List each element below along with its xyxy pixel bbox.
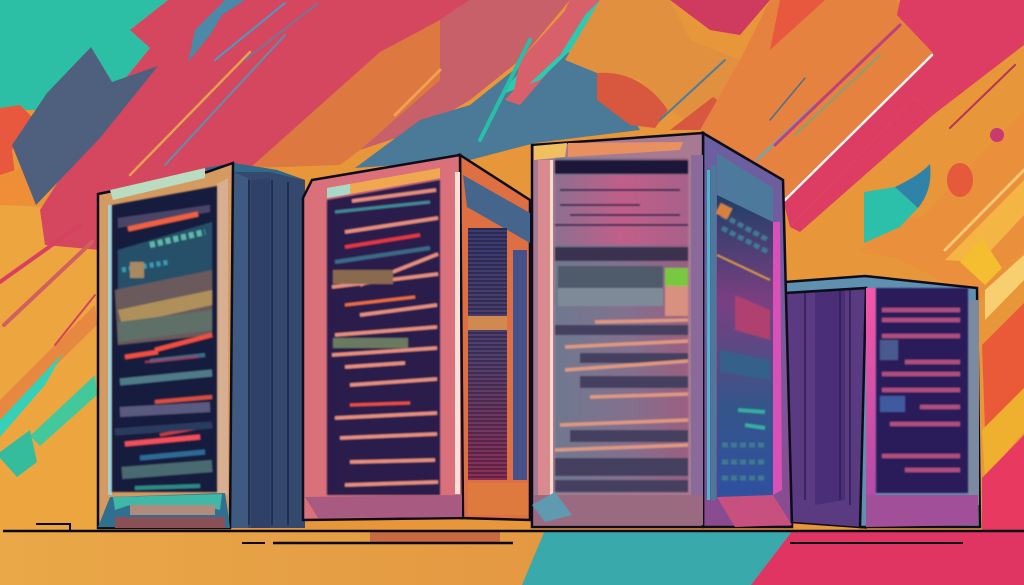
rack 1	[98, 163, 305, 528]
rack 2 front frame	[303, 155, 463, 520]
rack 3 side panel	[703, 133, 792, 527]
orange streak zone	[700, 0, 933, 200]
rack 4 front frame	[785, 276, 980, 527]
teal-blue leaf shape	[864, 164, 930, 243]
dark slate patch	[12, 47, 158, 205]
red-orange arcs	[597, 73, 668, 128]
rack 3	[532, 133, 792, 527]
blue haze behind racks	[355, 50, 640, 168]
ground lines	[3, 524, 1024, 543]
rack 1 server bays	[112, 186, 217, 492]
rack 3 front frame	[532, 133, 703, 527]
red main wash	[40, 0, 470, 250]
rack 2 side panel	[460, 155, 530, 520]
rack 2 base	[305, 172, 462, 518]
red diagonal band	[783, 0, 1024, 227]
rack 4	[785, 276, 980, 528]
rack 4 side panel	[785, 280, 866, 528]
left lower paint strokes	[0, 305, 97, 477]
rack 1 front frame	[98, 163, 233, 528]
floor colour blocks	[0, 530, 1024, 585]
rack 4 base	[866, 495, 978, 527]
rack 2 server bays	[327, 180, 440, 500]
rack 1 side panel	[205, 163, 305, 528]
rack 3 server bays	[555, 158, 688, 493]
rack 2	[303, 155, 530, 520]
red and teal streaks, top centre	[360, 0, 570, 150]
right side pale stripes	[945, 180, 1024, 320]
rack 4 server bays	[876, 288, 968, 493]
upper blue shard	[188, 0, 245, 62]
rack 1 teal plinth	[98, 493, 230, 528]
rack 3 base	[532, 492, 703, 525]
